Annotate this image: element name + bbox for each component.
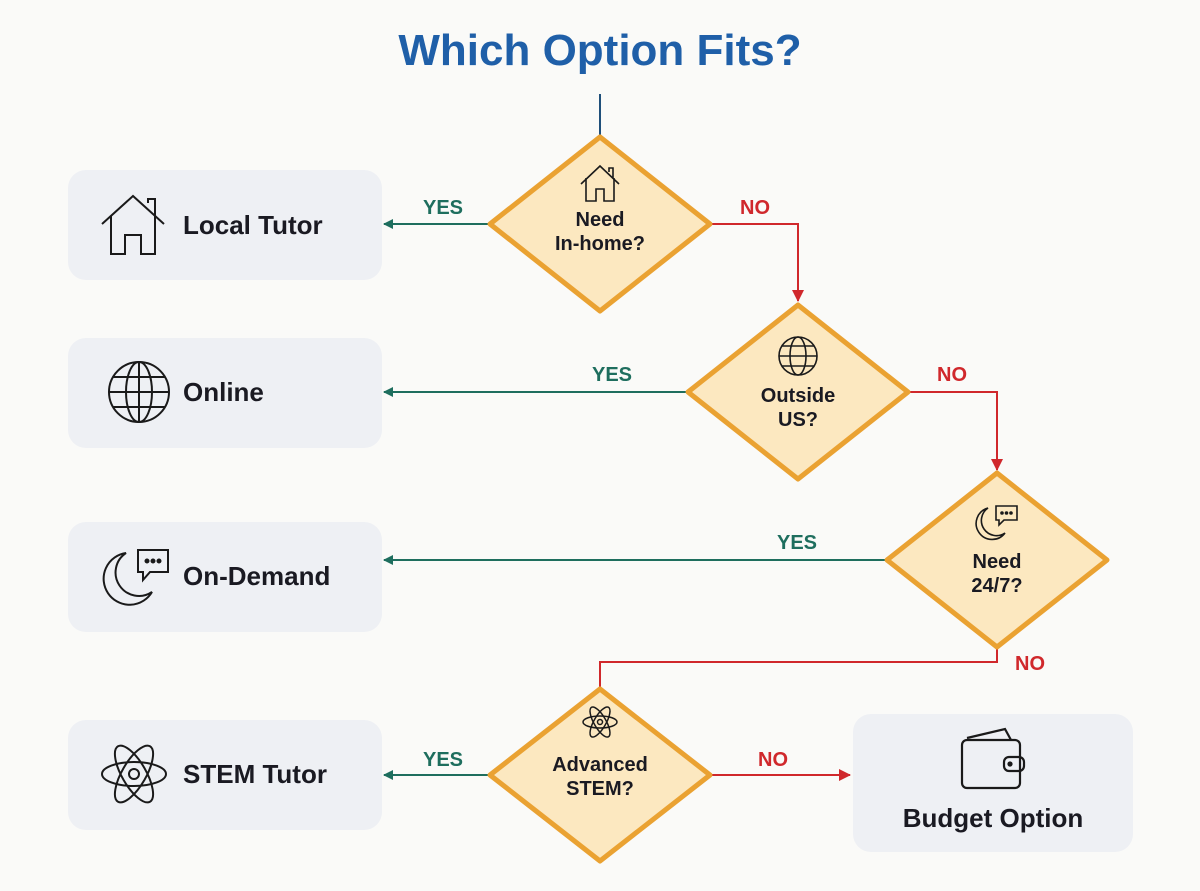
start line <box>599 94 601 135</box>
diamond: Need 24/7 <box>887 473 1107 647</box>
labels: NO <box>1015 653 1045 675</box>
arrows NO (red) <box>600 224 997 775</box>
box: Budget Option: Budget Option <box>903 803 1083 833</box>
box: On-Demand <box>68 522 382 632</box>
diamond: Advanced STEM: Advanced <box>552 754 648 776</box>
title: Which Option Fits? <box>398 26 802 75</box>
box: Online <box>68 338 382 448</box>
icon: moon chat <box>104 550 168 605</box>
box: Local Tutor: Local Tutor <box>183 210 323 240</box>
box: Online: Online <box>183 377 264 407</box>
arrows YES (green) <box>384 224 887 775</box>
diamond: Need In-home <box>490 137 710 311</box>
box: Budget Option <box>853 714 1133 852</box>
box: Local Tutor <box>68 170 382 280</box>
labels: YES <box>777 532 817 554</box>
diamond: Need In-home: In-home? <box>555 233 645 255</box>
box: STEM Tutor: STEM Tutor <box>183 759 327 789</box>
diamond: Advanced STEM: STEM? <box>566 778 634 800</box>
diamond: Need 24/7: 24/7? <box>971 575 1023 597</box>
icon: globe <box>109 362 169 422</box>
diamond: Outside US: US? <box>778 409 818 431</box>
labels: NO <box>937 364 967 386</box>
icon: house <box>102 196 164 254</box>
icon: atom <box>102 740 166 808</box>
diamond: Need In-home: Need <box>576 209 624 231</box>
labels: YES <box>423 749 463 771</box>
labels: NO <box>740 197 770 219</box>
diamond: Need 24/7: Need <box>973 551 1021 573</box>
box: On-Demand: On-Demand <box>183 561 330 591</box>
diamond: Outside US: Outside <box>761 385 835 407</box>
diamond: Advanced STEM <box>490 689 710 861</box>
diamond: Outside US <box>688 305 908 479</box>
labels: YES <box>423 197 463 219</box>
labels: NO <box>758 749 788 771</box>
labels <box>423 197 1045 771</box>
icon: wallet <box>962 729 1024 788</box>
box: STEM Tutor <box>68 720 382 830</box>
labels: YES <box>592 364 632 386</box>
